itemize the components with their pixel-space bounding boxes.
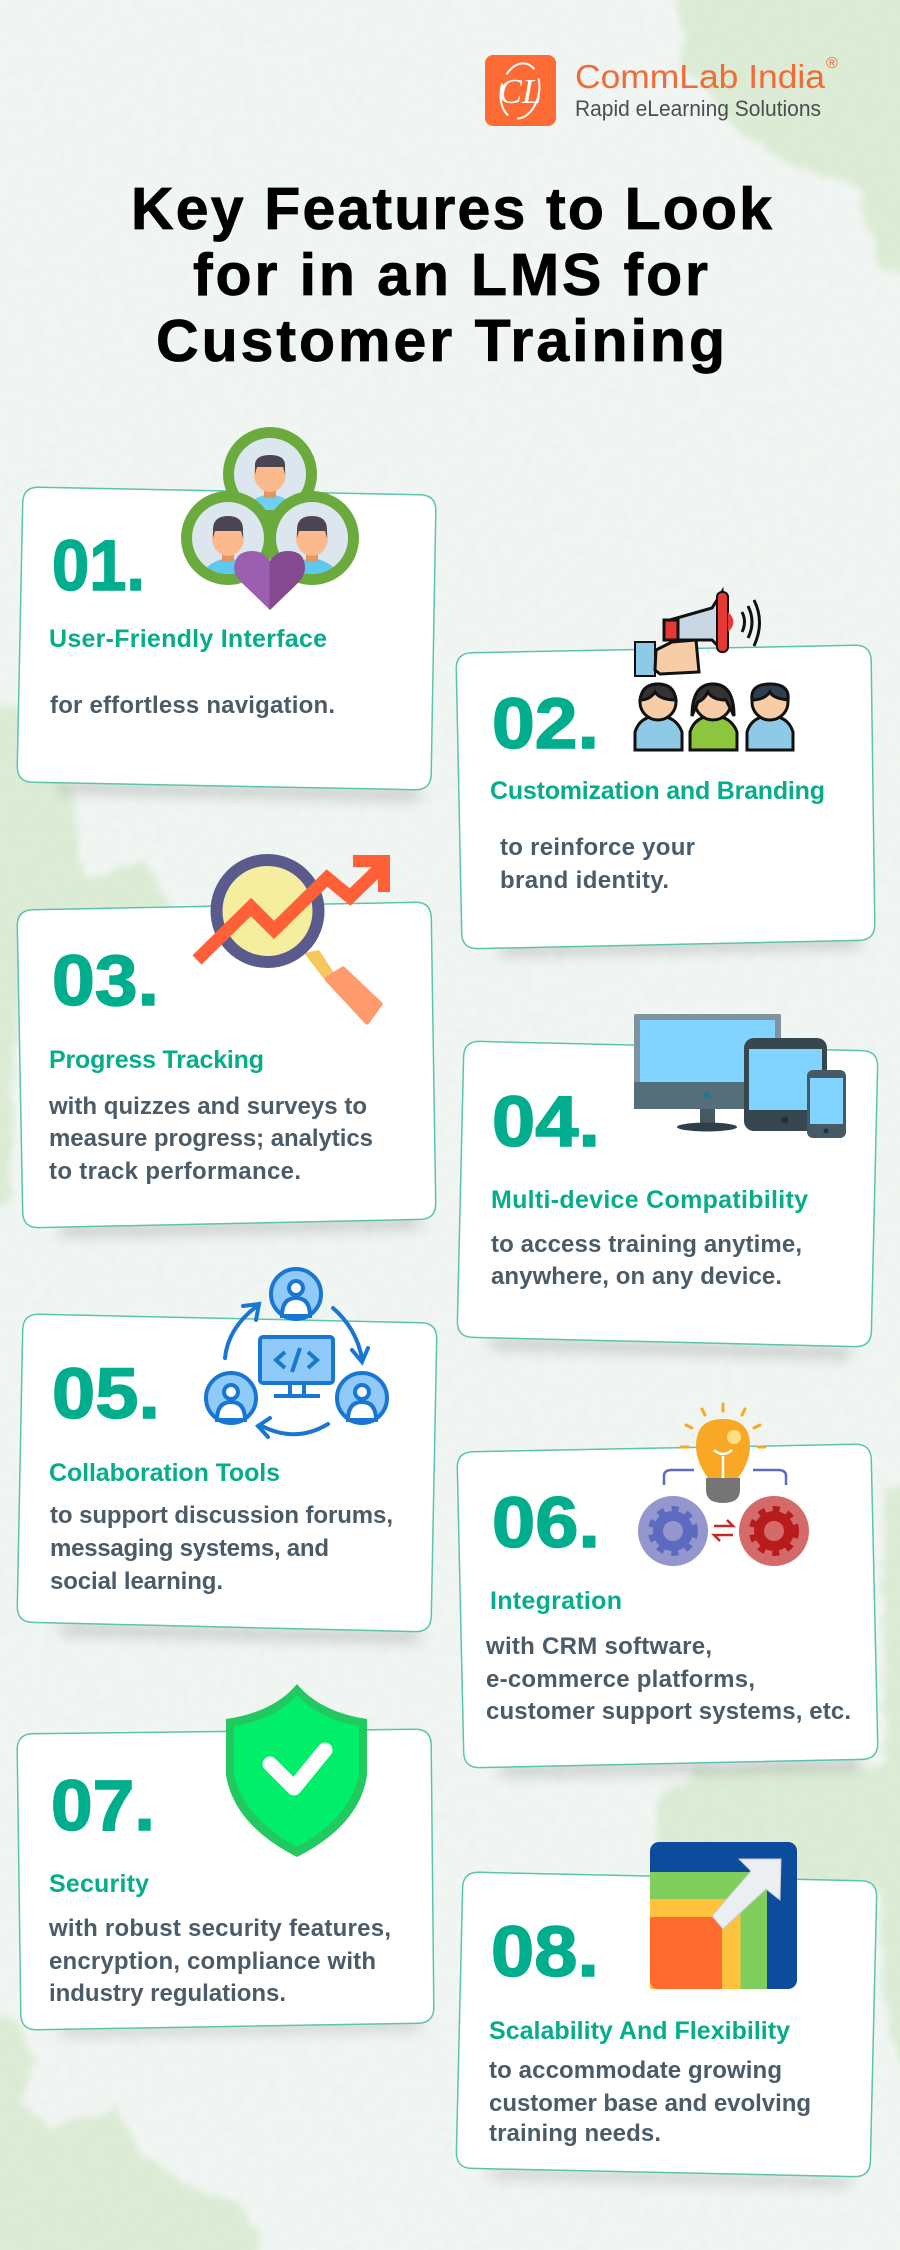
- text: with robust security features,: [48, 1915, 391, 1942]
- heading: Progress Tracking: [49, 1046, 264, 1074]
- number: 05.: [52, 1355, 160, 1434]
- text: for effortless navigation.: [50, 692, 335, 719]
- title: [131, 176, 772, 374]
- icon: three users with heart: [181, 427, 359, 610]
- icon: magnifier over rising chart: [197, 855, 390, 1022]
- text: measure progress; analytics: [49, 1125, 373, 1152]
- text: customer support systems, etc.: [486, 1698, 851, 1725]
- text: [50, 1502, 393, 1595]
- title: Key Features to Look: [131, 176, 772, 242]
- icon: collaboration network: [206, 1269, 387, 1437]
- text: [485, 1633, 851, 1725]
- text: [500, 834, 695, 894]
- text: social learning.: [50, 1568, 223, 1595]
- text: [491, 1231, 802, 1290]
- title: Customer Training: [156, 308, 725, 374]
- heading: Security: [49, 1870, 149, 1898]
- logo mark: [485, 55, 556, 126]
- text: encryption, compliance with: [49, 1948, 376, 1975]
- heading: Scalability And Flexibility: [489, 2017, 790, 2045]
- text: [48, 1093, 373, 1185]
- panel: 08 Scalability And Flexibility: [456, 1842, 877, 2182]
- logo tagline: Rapid eLearning Solutions: [575, 96, 821, 121]
- text: to reinforce your: [500, 834, 695, 861]
- text: industry regulations.: [49, 1980, 286, 2007]
- text: e-commerce platforms,: [486, 1666, 755, 1693]
- text: with quizzes and surveys to: [48, 1093, 367, 1120]
- number: 04.: [492, 1083, 600, 1162]
- heading: Collaboration Tools: [49, 1459, 280, 1487]
- number: 06.: [492, 1484, 600, 1563]
- panel: 01 User-Friendly Interface: [17, 427, 436, 795]
- text: to support discussion forums,: [50, 1502, 393, 1529]
- text: brand identity.: [500, 867, 669, 894]
- text: to access training anytime,: [491, 1231, 802, 1258]
- panel: 04 Multi-device Compatibility: [457, 1014, 878, 1353]
- registered mark: ®: [826, 55, 838, 72]
- text: with CRM software,: [485, 1633, 712, 1660]
- logo wordmark: CommLab India: [575, 58, 826, 95]
- heading: Integration: [490, 1587, 622, 1615]
- number: 03.: [52, 942, 159, 1021]
- panel: 05 Collaboration Tools: [17, 1269, 437, 1637]
- icon: monitor, tablet and phone: [634, 1014, 846, 1138]
- icon: green shield with check: [226, 1684, 367, 1857]
- number: 02.: [492, 685, 599, 764]
- heading: User-Friendly Interface: [49, 625, 327, 653]
- text: anywhere, on any device.: [491, 1263, 782, 1290]
- heading: Multi-device Compatibility: [491, 1186, 808, 1214]
- text: [48, 1915, 391, 2007]
- logo mark: CL: [499, 72, 541, 111]
- text: to track performance.: [49, 1158, 301, 1185]
- title: for in an LMS for: [193, 242, 708, 308]
- text: customer base and evolving: [489, 2090, 811, 2117]
- icon: growth squares with arrow: [650, 1842, 797, 1989]
- panel: 07 Security: [17, 1684, 434, 2031]
- logo: CommLab India: [485, 55, 838, 126]
- number: 08.: [491, 1913, 599, 1992]
- panel: 03 Progress Tracking: [17, 855, 436, 1231]
- panel: 06 Integration: [457, 1404, 878, 1771]
- icon: megaphone and audience: [635, 592, 793, 750]
- text: to accommodate growing: [489, 2057, 782, 2084]
- text: messaging systems, and: [50, 1535, 329, 1562]
- number: 01.: [52, 527, 145, 606]
- panel: 02 Customization and Branding: [456, 592, 875, 950]
- text: [489, 2057, 811, 2147]
- number: 07.: [51, 1767, 155, 1846]
- text: training needs.: [489, 2120, 661, 2147]
- heading: Customization and Branding: [490, 777, 825, 805]
- icon: light bulb and gears: [638, 1404, 809, 1566]
